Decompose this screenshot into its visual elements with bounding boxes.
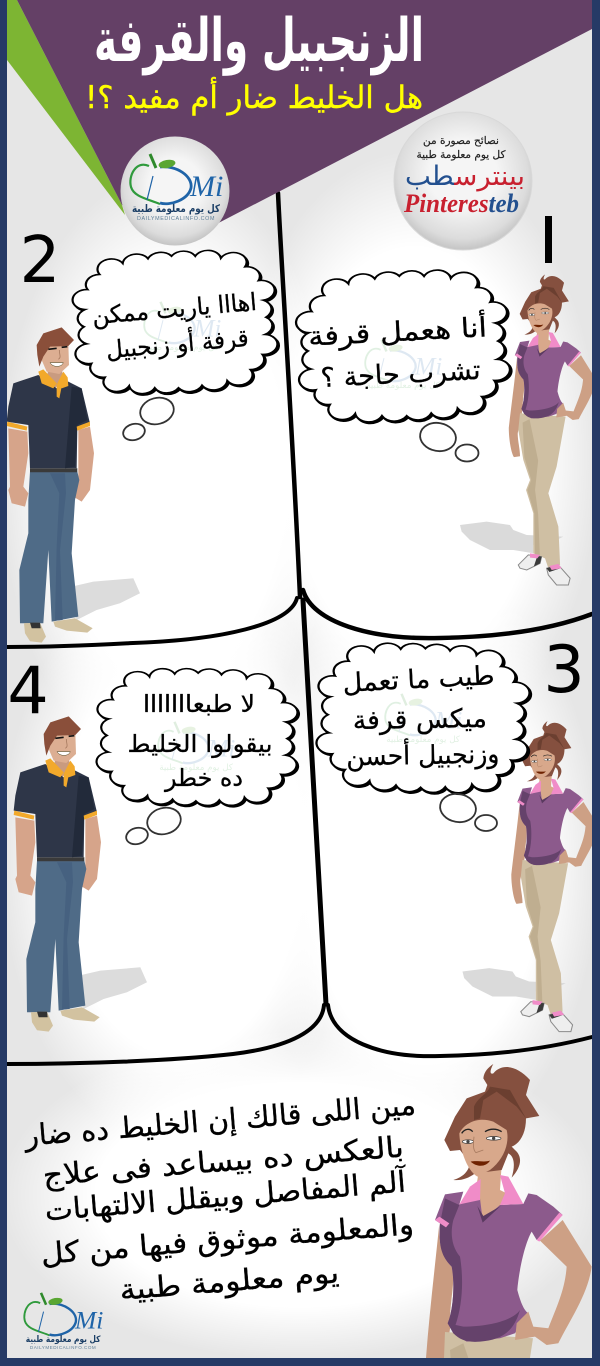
character: woman xyxy=(511,721,599,1032)
subtitle: هل الخليط ضار أم مفيد ؟! xyxy=(85,77,423,116)
speech bubble 4: ده خطر xyxy=(164,764,243,792)
closing message xyxy=(21,1087,417,1307)
logo badge: Pinterest tips: نصائح مصورة من xyxy=(423,135,499,147)
footer logo: DMi: DAILYMEDICALINFO.COM xyxy=(30,1345,96,1350)
speech bubble 4: لا طبعااااااا xyxy=(143,690,255,718)
character: man shadow xyxy=(79,967,147,1009)
large woman character xyxy=(426,1064,592,1358)
character: man shadow xyxy=(72,578,140,620)
panel 4 xyxy=(7,654,300,1032)
logo badge: Pinterest tips: Pinteresteb xyxy=(403,189,519,218)
header: green strip xyxy=(7,0,125,215)
header: purple banner xyxy=(17,0,592,243)
logo badge: Pinterest tips xyxy=(394,112,532,250)
logo badge: DMi: Mi xyxy=(189,170,223,203)
number 4: 4 xyxy=(7,654,49,729)
number 1: ١ xyxy=(544,207,553,277)
speech bubble 3: Mi xyxy=(434,708,462,735)
character: man xyxy=(14,716,101,1032)
logo badge: DMi: DAILYMEDICALINFO.COM xyxy=(137,216,215,222)
logo badge: DMi: كل يوم معلومة طبية xyxy=(132,203,221,215)
speech bubble 3: طيب ما تعمل xyxy=(342,661,495,699)
speech bubble 3: ميكس قرفة xyxy=(353,704,487,736)
speech bubble 1: تشرب حاجة ؟ xyxy=(320,355,481,394)
logo badge: Pinterest tips: بينترسطب xyxy=(405,161,525,192)
character: woman xyxy=(509,274,596,585)
speech bubble 4 xyxy=(96,667,300,847)
speech bubble 4: Mi xyxy=(207,736,235,763)
speech bubble 2: اهااا ياريت ممكن xyxy=(91,288,258,330)
closing message: يوم معلومة طبية xyxy=(118,1255,340,1307)
speech bubble 4: كل يوم معلومة طبية xyxy=(159,763,234,773)
panel 3 xyxy=(315,633,599,1032)
speech bubble 1: أنا هعمل قرفة xyxy=(307,308,488,353)
speech bubble 3: وزنجبيل أحسن xyxy=(346,736,500,772)
speech bubble 1: كل يوم معلومة طبية xyxy=(366,381,441,391)
speech bubble 2 xyxy=(70,246,281,443)
closing message: آلم المفاصل وبيقلل الالتهابات xyxy=(43,1163,409,1228)
number 3: 3 xyxy=(543,633,585,708)
closing message: والمعلومة موثوق فيها من كل xyxy=(39,1207,415,1271)
closing message: بالعكس ده بيساعد فى علاج xyxy=(41,1130,405,1193)
character: man xyxy=(7,327,94,643)
number 2: 2 xyxy=(20,224,60,298)
character: woman shadow xyxy=(460,522,563,553)
character: woman shadow xyxy=(462,968,566,1000)
panel 1 xyxy=(294,207,596,585)
speech bubble 1 xyxy=(294,266,514,462)
panel 2 xyxy=(7,224,281,643)
speech bubble 2: كل يوم معلومة طبية xyxy=(145,343,220,353)
logo badge: Pinterest tips: كل يوم معلومة طبية xyxy=(417,149,505,161)
footer logo: DMi: Mi xyxy=(74,1306,103,1335)
closing message: مين اللى قالك إن الخليط ده ضار xyxy=(21,1087,417,1154)
footer logo: DMi: كل يوم معلومة طبية xyxy=(26,1335,101,1345)
speech bubble 2: قرفة أو زنجبيل xyxy=(105,322,250,364)
footer logo: DMi xyxy=(24,1293,103,1350)
speech bubble 3 xyxy=(315,640,533,831)
speech bubble 3: كل يوم معلومة طبية xyxy=(386,735,461,745)
speech bubble 1: Mi xyxy=(414,354,442,381)
speech bubble 2: Mi xyxy=(193,316,221,343)
speech bubble 4: بيقولوا الخليط xyxy=(128,730,272,758)
logo badge: DMi xyxy=(120,136,230,246)
title: الزنجبيل والقرفة xyxy=(94,6,424,76)
panel divider lines xyxy=(7,193,592,1064)
